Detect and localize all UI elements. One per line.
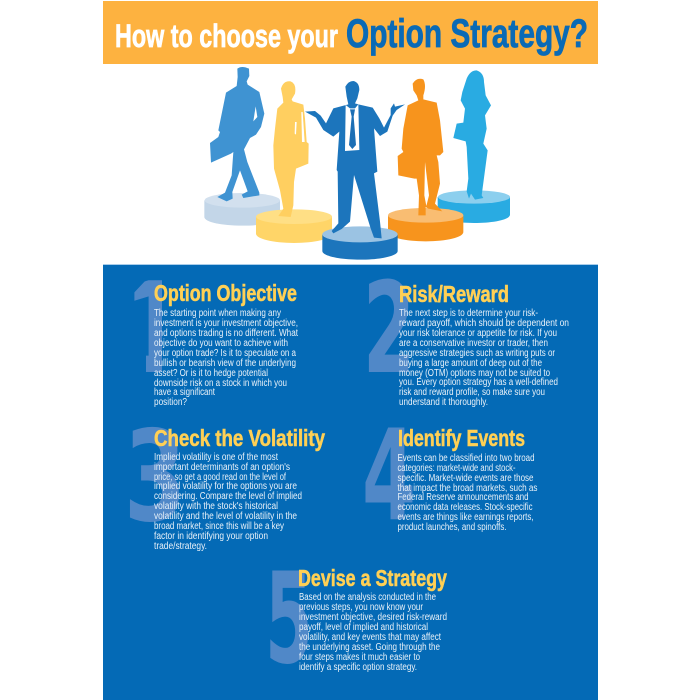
body text 2: money (OTM) options may not be suited to [399,368,550,379]
body text 2: are a conservative investor or trader, then [399,338,548,349]
number 5: 5 [265,545,313,692]
body text 1: asset? Or is it to hedge potential [154,368,268,379]
body text 4 [398,453,538,533]
number 2: 2 [363,255,415,402]
body text 3: trade/strategy. [154,541,207,552]
body text 5: identify a specific option strategy. [299,662,417,673]
body text 1: The starting point when making any [154,308,281,319]
heading 4: Identify Events [398,425,525,451]
body text 4: product launches, and spinoffs. [398,522,506,533]
person: woman with handbag, cyan [453,70,491,200]
main blue panel [103,265,598,700]
step 5: Devise a Strategy [265,545,447,692]
heading 1: Option Objective [154,280,297,306]
title banner: How to choose your [115,18,338,54]
body text 2: reward payoff, which should be dependent on [399,318,569,329]
person: walking man [210,67,264,201]
body text 5 [299,592,447,673]
body text 1 [154,308,298,408]
number 4: 4 [362,402,416,549]
body text 5: volatility, and key events that may affect [299,632,441,643]
body text 3: volatility with the stock's historical [154,501,278,512]
body text 1: bullish or bearish view of the underlying [154,358,296,369]
body text 2: understand it thoroughly. [399,397,488,408]
heading 5: Devise a Strategy [298,565,447,591]
number 1: 1 [125,255,183,402]
divider line above panel [103,264,598,265]
body text 1: objective do you want to achieve with [154,338,288,349]
body text 3: important determinants of an option's [154,462,290,473]
title banner: Option Strategy? [346,12,588,56]
heading 3: Check the Volatility [154,425,325,451]
body text 5: Based on the analysis conducted in the [299,592,436,603]
body text 3: implied volatility for the options you are [154,481,297,492]
body text 5: four steps makes it much easier to [299,652,420,663]
body text 3: Implied volatility is one of the most [154,452,278,463]
body text 1: have a significant [154,387,215,398]
body text 4: events are things like earnings reports, [398,512,534,523]
pedestal: yellow [256,209,332,243]
body text 4: specific. Market-wide events are those [398,473,534,484]
body text 2: you. Every option strategy has a well-defined [399,377,558,388]
body text 3 [154,452,302,552]
body text 4: economic data releases. Stock-specific [398,502,533,513]
body text 3: broad market, since this will be a key [154,521,284,532]
body text 3: volatility and the level of volatility in the [154,511,297,522]
title banner [103,1,598,64]
body text 2: The next step is to determine your risk- [399,308,538,319]
body text 2: your risk tolerance or appetite for risk. If you [399,328,557,339]
body text 1: your option trade? Is it to speculate on a [154,348,296,359]
left group: walking man and woman in yellow [204,67,332,243]
body text 3: factor in identifying your option [154,531,268,542]
pedestal: blue [322,226,398,260]
number 3: 3 [124,403,186,550]
pedestal: light blue [204,193,280,226]
body text 5: investment objective, desired risk-reward [299,612,447,623]
heading 2: Risk/Reward [399,281,509,307]
body text 3: considering. Compare the level of implied [154,491,302,502]
pedestal: orange [388,208,463,241]
body text 5: previous steps, you now know your [299,602,424,613]
body text 4: Federal Reserve announcements and [398,492,528,503]
body text 2: aggressive strategies such as writing puts or [399,348,556,359]
body text 3: price, so get a good read on the level of [154,472,286,483]
body text 4: that impact the broad markets, such as [398,483,538,494]
person: man with briefcase, orange [398,79,443,215]
step 1: Option Objective [134,280,298,407]
pedestal: cyan [438,190,510,223]
body text 5: payoff, level of implied and historical [299,622,428,633]
body text 2: risk and reward profile, so make sure you [399,387,545,398]
body text 2: buying a large amount of deep out of the [399,358,542,369]
illustration: business people on pedestals [204,67,510,260]
step 2: Risk/Reward [363,255,569,408]
body text 2 [399,308,569,408]
body text 4: Events can be classified into two broad [398,453,534,464]
step 4: Identify Events [362,402,538,549]
body text 1: and options trading is no different. What [154,328,298,339]
person: woman in yellow [273,81,309,217]
body text 1: investment is your investment objective, [154,318,298,329]
body text 4: categories: market-wide and stock- [398,463,516,474]
person: central man shrugging [305,81,405,238]
step 3: Check the Volatility [124,403,325,552]
body text 1: downside risk on a stock in which you [154,378,287,389]
right group: woman in cyan and man in orange [388,70,510,241]
body text 1: position? [154,397,188,408]
body text 5: the underlying asset. Going through the [299,642,440,653]
center group: man shrugging [305,81,405,260]
